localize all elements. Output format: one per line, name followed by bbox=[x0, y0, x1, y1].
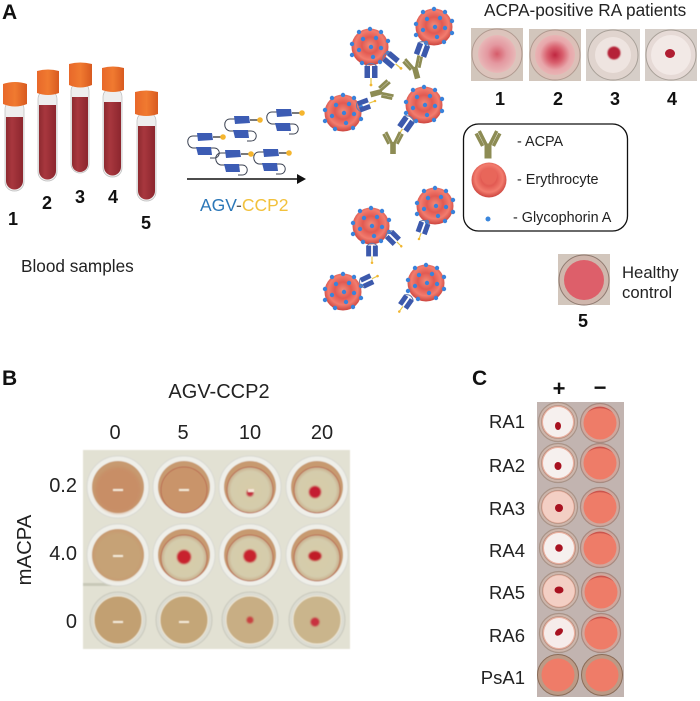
row labels for panel C bbox=[481, 411, 525, 688]
row 0.2 wells bbox=[87, 456, 348, 518]
row labels for panel C: RA6 bbox=[489, 625, 525, 646]
row labels for panel C: RA5 bbox=[489, 582, 525, 603]
well 3 bbox=[586, 29, 640, 81]
number 5: 5 bbox=[578, 311, 588, 331]
agglutinated erythrocytes bbox=[323, 7, 454, 154]
negative wells bbox=[580, 404, 622, 696]
tube numbers: 4 bbox=[108, 187, 118, 207]
well numbers bbox=[495, 89, 677, 109]
tube numbers bbox=[8, 187, 151, 233]
healthy control label: Healthy bbox=[622, 263, 679, 282]
panel C: well strip bbox=[537, 402, 624, 697]
well numbers: 1 bbox=[495, 89, 505, 109]
y axis label: mACPA bbox=[14, 514, 36, 585]
column labels: 10 bbox=[239, 422, 261, 444]
column labels bbox=[109, 422, 333, 444]
legend box bbox=[464, 124, 628, 231]
row labels for panel C: RA1 bbox=[489, 411, 525, 432]
row labels bbox=[49, 475, 77, 633]
well 4 bbox=[645, 29, 697, 81]
plus and minus column labels bbox=[553, 375, 606, 401]
well 1 bbox=[471, 28, 523, 81]
row 0 wells bbox=[90, 592, 345, 648]
row labels for panel C: RA3 bbox=[489, 498, 525, 519]
heading: ACPA-positive RA patients: ACPA-positive RA patients bbox=[484, 0, 686, 20]
row labels for panel C: RA2 bbox=[489, 455, 525, 476]
patient wells bbox=[471, 28, 697, 109]
tube 1 bbox=[3, 82, 27, 191]
tube numbers: 5 bbox=[141, 213, 151, 233]
plus and minus column labels: + bbox=[553, 376, 565, 401]
tube 3 bbox=[69, 62, 92, 173]
panel label: A: A bbox=[2, 1, 17, 24]
tube numbers: 1 bbox=[8, 209, 18, 229]
well 2 bbox=[529, 29, 581, 81]
tube numbers: 2 bbox=[42, 193, 52, 213]
column labels: 20 bbox=[311, 422, 333, 444]
AGV-CCP2 label: AGV-CCP2 bbox=[200, 195, 289, 215]
tube 5 bbox=[135, 90, 158, 201]
row labels for panel C: RA4 bbox=[489, 540, 525, 561]
tube 4 bbox=[102, 66, 124, 177]
well numbers: 4 bbox=[667, 89, 677, 109]
well numbers: 3 bbox=[610, 89, 620, 109]
healthy control well bbox=[558, 254, 610, 305]
row 4.0 wells bbox=[87, 524, 348, 586]
legend: erythrocyte bbox=[472, 162, 599, 198]
tube numbers: 3 bbox=[75, 187, 85, 207]
legend: ACPA: - ACPA bbox=[517, 134, 564, 150]
row labels: 4.0 bbox=[49, 543, 77, 565]
panel label: C: C bbox=[472, 367, 487, 390]
column labels: 5 bbox=[177, 422, 189, 444]
blood samples caption: Blood samples bbox=[21, 256, 134, 276]
panel B: well plate bbox=[83, 450, 350, 649]
positive wells bbox=[538, 402, 578, 696]
row labels for panel C: PsA1 bbox=[481, 667, 525, 688]
plus and minus column labels: − bbox=[594, 375, 606, 400]
panel label: B: B bbox=[2, 367, 17, 390]
arrow bbox=[187, 174, 306, 184]
legend: ACPA bbox=[476, 131, 564, 158]
row labels: 0.2 bbox=[49, 475, 77, 497]
tube 2 bbox=[37, 70, 59, 181]
legend: erythrocyte: - Erythrocyte bbox=[517, 172, 599, 188]
AGV-CCP2 peptides bbox=[188, 109, 305, 175]
healthy control label: control bbox=[622, 283, 672, 302]
column labels: 0 bbox=[109, 422, 121, 444]
legend: glycophorin A: - Glycophorin A bbox=[513, 210, 612, 226]
panel A: blood samples bbox=[3, 62, 158, 276]
panel B title: AGV-CCP2 bbox=[168, 381, 270, 403]
unbound erythrocytes bbox=[323, 186, 455, 316]
well numbers: 2 bbox=[553, 89, 563, 109]
row labels: 0 bbox=[66, 611, 77, 633]
